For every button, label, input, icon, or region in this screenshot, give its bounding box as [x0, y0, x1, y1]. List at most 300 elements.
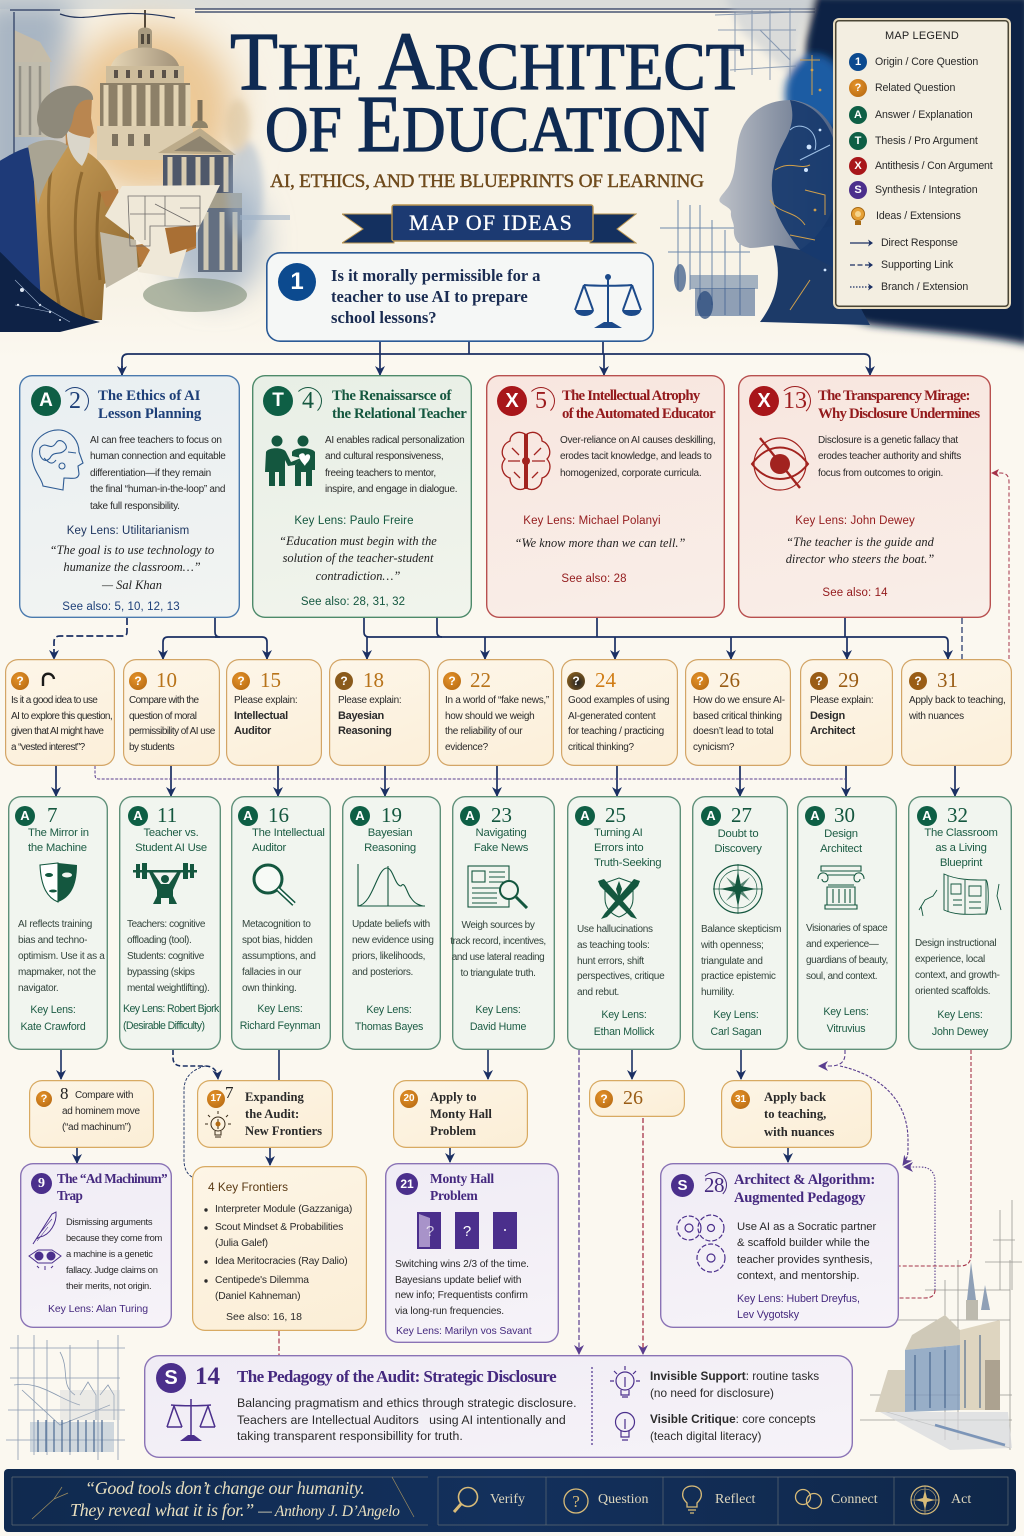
node badge 1: 1 — [290, 268, 304, 295]
icon: newspaper magnifier — [467, 865, 529, 909]
item 4: (Daniel Kahneman) — [215, 1291, 300, 1302]
text: given that AI might have — [11, 726, 103, 737]
body: bypassing (skips — [127, 967, 195, 978]
title: Truth-Seeking — [594, 856, 661, 868]
badge X — [749, 386, 779, 416]
badge — [849, 79, 867, 97]
panel: node 13 mirage — [738, 375, 991, 618]
heading: The “Ad Machinum” — [57, 1171, 167, 1186]
body — [18, 917, 105, 997]
title: Teacher vs. — [143, 826, 198, 838]
number 14: 14 — [195, 1363, 220, 1390]
badge X: X — [505, 390, 519, 412]
body: Teachers are Intellectual Auditors using AI intentionally and — [237, 1413, 566, 1427]
icon: three doors: ? — [426, 1223, 434, 1240]
key lens: Key Lens: Marilyn vos Savant — [396, 1325, 532, 1337]
body text: Disclosure is a genetic fallacy that — [818, 435, 958, 446]
text — [909, 693, 1006, 724]
domed building — [97, 10, 290, 312]
reflect — [680, 1483, 760, 1519]
title — [364, 826, 416, 856]
body: Bayesians update belief with — [395, 1275, 521, 1286]
text: visible critique: (teach digital literacy) — [650, 1429, 761, 1443]
icon: blueprint scroll — [915, 872, 1005, 922]
body: practice epistemic — [701, 971, 776, 982]
body — [66, 1214, 162, 1294]
text: Expanding — [245, 1090, 304, 1104]
lower right blueprint sketch — [860, 1200, 1022, 1450]
question card 20 — [393, 1080, 528, 1148]
answer card 19 — [342, 796, 441, 1050]
body: to triangulate truth. — [461, 968, 535, 979]
body: their merits, not origin. — [66, 1280, 151, 1291]
question card 6 — [5, 659, 115, 766]
text: permissibility of AI use — [129, 726, 215, 737]
badge — [31, 1173, 52, 1194]
heading — [332, 388, 467, 422]
icon: bulb — [205, 1111, 231, 1141]
footer quote: “Good tools don’t change our humanity. — [85, 1478, 365, 1498]
heading: of the Automated Educator — [562, 406, 715, 422]
verify — [452, 1483, 532, 1519]
text: (“ad machinum”) — [62, 1122, 131, 1133]
text: invisible support: (no need for disclosure) — [650, 1386, 774, 1400]
text: Reasoning — [338, 725, 392, 737]
badge — [232, 672, 250, 690]
text: doesn’t lead to total — [693, 726, 773, 737]
key lens — [240, 1001, 320, 1034]
key lens: Key Lens: — [366, 1004, 412, 1016]
text: Good examples of using — [568, 695, 669, 706]
badge — [238, 806, 258, 826]
quote: contradiction…” — [316, 569, 400, 583]
number: 8 — [60, 1084, 68, 1103]
number 5 — [527, 387, 555, 415]
see also: See also: 28 — [561, 573, 627, 585]
title — [230, 15, 744, 169]
question row to answer row — [56, 766, 955, 796]
badge — [443, 672, 461, 690]
node badge 1 — [278, 263, 316, 301]
panel: node 9 ad machinum — [20, 1163, 172, 1328]
body text: take full responsibility. — [90, 501, 180, 512]
text — [245, 1088, 322, 1140]
cyber head — [719, 55, 870, 325]
body: Teachers: cognitive — [127, 919, 205, 930]
text: by students — [129, 742, 174, 752]
body: Balance skepticism — [701, 924, 781, 935]
quote: “The goal is to use technology to — [50, 543, 214, 557]
title: Auditor — [252, 842, 286, 854]
number: 27 — [731, 803, 752, 827]
body text: and cultural responsiveness, — [325, 451, 443, 462]
badge — [849, 157, 867, 175]
body: as teaching tools: — [577, 940, 649, 951]
text: question of moral — [129, 710, 196, 722]
text: for teaching / practicing — [568, 726, 664, 737]
text: visible critique — [650, 1411, 816, 1446]
number: 23 — [491, 803, 512, 827]
icon: gears — [675, 1212, 729, 1274]
text: based critical thinking — [693, 710, 782, 722]
text: Compare with — [75, 1090, 133, 1101]
footer quote: They reveal what it is for.” — Anthony J. D’Angelo — [70, 1500, 400, 1520]
body: spot bias, hidden — [242, 935, 313, 946]
badge: ? — [16, 674, 24, 688]
title — [594, 826, 661, 870]
title: Doubt to — [718, 828, 758, 840]
quote — [279, 534, 437, 583]
text: Design — [810, 710, 845, 722]
badge — [15, 806, 35, 826]
body: a machine is a genetic — [66, 1248, 153, 1259]
body — [352, 917, 434, 981]
body: Balancing pragmatism and ethics through strategic disclosure. — [237, 1396, 577, 1410]
key lens: Key Lens: — [30, 1004, 76, 1016]
body: Students: cognitive — [127, 951, 204, 962]
question card 10 — [123, 659, 220, 766]
label: Question — [598, 1492, 649, 1507]
text: with nuances — [764, 1124, 834, 1138]
badge — [909, 672, 927, 690]
scholar figure — [0, 86, 196, 330]
label: Act — [951, 1492, 971, 1507]
question card 31 — [901, 659, 1012, 766]
legend: ideas — [851, 207, 961, 225]
body text: the final “human-in-the-loop” and — [90, 484, 225, 495]
body: Use AI as a Socratic partner — [737, 1220, 876, 1232]
icon: weightlifter — [133, 862, 197, 906]
body: context, and mentorship. — [737, 1270, 860, 1282]
body: fallacy. Judge claims on — [66, 1264, 158, 1275]
heading: The Intellectual Atrophy — [562, 388, 699, 404]
quote: — Sal Khan — [102, 578, 162, 592]
badge: ? — [41, 1093, 47, 1105]
icon: scales — [166, 1397, 216, 1443]
hero background art — [0, 0, 1024, 351]
text — [568, 693, 669, 755]
heading — [98, 388, 202, 422]
title: Design — [824, 828, 858, 840]
key lens: John Dewey — [932, 1026, 988, 1038]
legend: branch — [850, 281, 968, 293]
question card 29 — [800, 659, 893, 766]
number: 24 — [595, 668, 616, 692]
label: Verify — [490, 1492, 525, 1507]
footer quote — [85, 1477, 400, 1523]
core question text: teacher to use AI to prepare — [331, 287, 528, 306]
body: own thinking. — [242, 983, 296, 994]
key lens: (Desirable Difficulty) — [123, 1020, 204, 1032]
icon: three doors — [417, 1212, 517, 1250]
quote: “We know more than we can tell.” — [515, 536, 685, 550]
number: 26 — [719, 668, 740, 692]
badge: A — [20, 808, 30, 823]
body: oriented scaffolds. — [915, 986, 990, 997]
badge: 9 — [38, 1176, 45, 1191]
heading: Architect & Algorithm: — [734, 1172, 875, 1188]
title: Architect — [820, 842, 862, 854]
see also: See also: 28, 31, 32 — [301, 596, 405, 608]
body: Dismissing arguments — [66, 1216, 152, 1227]
core question text: Is it morally permissible for a — [331, 266, 540, 285]
badge — [460, 806, 480, 826]
icon: magnifier — [452, 1485, 480, 1515]
badge — [128, 806, 148, 826]
icon: mask — [39, 862, 79, 904]
icon: two people heart — [265, 436, 315, 486]
badge: 20 — [403, 1093, 415, 1104]
ribbon shape — [342, 204, 637, 244]
badge: 17 — [210, 1093, 222, 1104]
question card 24 — [561, 659, 678, 766]
number 2: 2 — [69, 388, 81, 414]
body: hunt errors, shift — [577, 956, 644, 967]
title: the Machine — [28, 842, 87, 854]
key lens: David Hume — [470, 1020, 526, 1032]
panel: node 5 atrophy — [486, 375, 725, 618]
body: context, and growth- — [915, 970, 1000, 981]
body: Use hallucinations — [577, 924, 653, 935]
text: Problem — [430, 1124, 476, 1138]
answer card 16 — [231, 796, 331, 1050]
number 4: 4 — [302, 388, 314, 414]
key lens: Carl Sagan — [710, 1026, 762, 1038]
title — [135, 826, 207, 856]
badge: A — [243, 808, 253, 823]
legend: answer — [849, 106, 973, 124]
icon: brain — [501, 432, 551, 490]
body: humility. — [701, 987, 734, 998]
body text: AI can free teachers to focus on — [90, 435, 222, 446]
body text: differentiation—if they remain — [90, 468, 211, 479]
body: with openness; — [701, 940, 764, 951]
key lens: Key Lens: — [475, 1004, 521, 1016]
heading — [57, 1170, 167, 1204]
legend: antithesis — [849, 157, 993, 175]
body: assumptions, and — [242, 951, 316, 962]
badge S: S — [164, 1367, 178, 1389]
key lens — [470, 1002, 526, 1035]
arrow — [850, 262, 873, 268]
see also: See also: 14 — [822, 587, 888, 599]
body: Metacognition to — [242, 919, 311, 930]
core to top cards — [122, 342, 870, 375]
text: Monty Hall — [430, 1106, 492, 1120]
dotted separator — [590, 1366, 594, 1446]
key lens — [932, 1007, 988, 1040]
body text: erodes tacit knowledge, and leads to — [560, 451, 712, 462]
title — [924, 826, 998, 870]
badge: A — [706, 808, 716, 823]
badge: ? — [914, 674, 922, 688]
body: bias and techno- — [18, 935, 87, 946]
badge — [810, 672, 828, 690]
badge: A — [580, 808, 590, 823]
text: how should we weigh — [445, 710, 534, 722]
number: 16 — [268, 803, 289, 827]
badge: ? — [696, 674, 704, 688]
key lens: Vitruvius — [827, 1022, 865, 1034]
body — [395, 1257, 529, 1320]
heading: 4 Key Frontiers — [208, 1180, 288, 1194]
body: perspectives, critique — [577, 971, 664, 982]
text: AI-generated content — [568, 710, 655, 722]
text — [129, 693, 215, 755]
badge — [691, 672, 709, 690]
key lens: Kate Crawford — [20, 1020, 86, 1032]
badge S — [156, 1363, 186, 1393]
badge — [400, 1090, 418, 1108]
badge: ? — [600, 1092, 608, 1106]
badge — [36, 1091, 52, 1107]
body: via long-run frequencies. — [395, 1306, 504, 1317]
icon: ionic column — [814, 865, 868, 911]
text: ad hominem move — [62, 1106, 140, 1117]
heading: Lesson Planning — [98, 406, 201, 422]
icon: crossed swords shield — [597, 877, 641, 920]
text: critical thinking? — [568, 742, 634, 752]
body text: erodes teacher authority and shifts — [818, 451, 961, 462]
icon: bulb support — [610, 1365, 640, 1399]
heading: The Renaissarsce of — [332, 388, 451, 404]
body text — [818, 435, 961, 479]
title: Turning AI — [594, 826, 643, 838]
legend: origin — [849, 53, 978, 71]
body — [915, 936, 1000, 1000]
badge: ? — [815, 674, 823, 688]
body — [127, 917, 209, 997]
title: Errors into — [594, 842, 643, 854]
text: Please explain: — [338, 695, 401, 706]
icon: rings — [794, 1488, 824, 1512]
label: Ideas / Extensions — [876, 210, 961, 222]
answer card 7 — [8, 796, 108, 1050]
key lens — [710, 1007, 762, 1040]
answer card 30 — [797, 796, 897, 1050]
text: How do we ensure AI- — [693, 695, 785, 706]
badge — [567, 672, 585, 690]
badge S — [671, 1174, 694, 1197]
body: optimism. Use it as a — [18, 951, 105, 962]
answer row to lower row — [61, 1050, 788, 1177]
title: The Classroom — [924, 826, 998, 838]
key lens: Richard Feynman — [240, 1020, 320, 1032]
see also: See also: 16, 18 — [226, 1311, 302, 1323]
badge: A — [922, 808, 932, 823]
body: and posteriors. — [352, 967, 413, 978]
title: Discovery — [714, 842, 762, 854]
left temple — [14, 30, 52, 137]
classroom sketch — [660, 200, 758, 319]
body: Design instructional — [915, 938, 996, 949]
badge: T — [855, 135, 861, 147]
badge S: S — [677, 1177, 688, 1194]
quote: “The teacher is the guide and — [786, 535, 934, 549]
text — [62, 1088, 140, 1136]
key lens — [123, 1001, 219, 1034]
title — [714, 826, 762, 856]
badge — [350, 806, 370, 826]
badge: ? — [448, 674, 456, 688]
panel: node 21 monty hall — [385, 1163, 559, 1343]
heading: The Transparency Mirage: — [818, 388, 970, 404]
icon: question mark: ? — [572, 1492, 580, 1511]
key lens — [355, 1002, 423, 1035]
number: 26 — [623, 1087, 643, 1109]
body text: AI enables radical personalization — [325, 435, 464, 446]
item 3: Idea Meritocracies (Ray Dalio) — [215, 1256, 347, 1267]
body text — [325, 435, 464, 495]
quote: director who steers the boat.” — [786, 552, 934, 566]
title: Bayesian — [368, 826, 412, 838]
body — [806, 921, 888, 985]
icon: question mark — [563, 1488, 589, 1514]
text: to teaching, — [764, 1107, 826, 1121]
heading: the Relational Teacher — [332, 406, 467, 422]
legend: direct response — [850, 237, 958, 249]
key lens: Key Lens: — [823, 1006, 869, 1018]
badge — [595, 1090, 613, 1108]
glitched number — [42, 672, 56, 686]
panel: 4 key frontiers — [192, 1166, 367, 1331]
body: because they come from — [66, 1232, 162, 1243]
key lens: Key Lens: — [713, 1009, 759, 1021]
badge T: T — [272, 390, 284, 411]
question — [562, 1483, 652, 1519]
body: guardians of beauty, — [806, 955, 888, 966]
icon: crossed eye — [750, 437, 810, 491]
number: 31 — [937, 668, 958, 692]
item 1: Interpreter Module (Gazzaniga) — [215, 1204, 352, 1215]
number: 7 — [225, 1083, 234, 1102]
number 13 — [779, 386, 811, 416]
key lens — [737, 1291, 860, 1323]
heading — [818, 388, 980, 422]
decorative left frame — [10, 9, 815, 290]
number: 32 — [947, 803, 968, 827]
text: the reliability of our — [445, 726, 522, 737]
item 2 — [215, 1220, 343, 1252]
title: as a Living — [935, 842, 987, 854]
blueprint grid right top — [715, 8, 796, 80]
heading: Problem — [430, 1188, 478, 1203]
arrow — [850, 284, 873, 290]
key lens: Key Lens: John Dewey — [795, 515, 915, 527]
icon: compass — [713, 864, 763, 914]
text — [445, 693, 549, 755]
body text — [560, 435, 715, 479]
number: 29 — [838, 668, 859, 692]
label: Origin / Core Question — [875, 56, 978, 68]
text: Apply back — [764, 1090, 826, 1104]
text — [234, 693, 297, 740]
question card 17 — [197, 1080, 333, 1148]
title line 2: OF EDUCATION — [265, 81, 709, 169]
key lens — [594, 1007, 654, 1040]
question card 22 — [437, 659, 554, 766]
answer card 11 — [119, 796, 221, 1050]
badge: S — [854, 184, 862, 196]
body: experience, local — [915, 954, 985, 965]
text: Please explain: — [810, 695, 873, 706]
body — [450, 918, 546, 982]
number: 30 — [834, 803, 855, 827]
purple branch line — [95, 766, 846, 779]
quote: “Education must begin with the — [279, 534, 437, 548]
core question text — [331, 266, 540, 327]
text: Apply back to teaching, — [909, 695, 1006, 706]
